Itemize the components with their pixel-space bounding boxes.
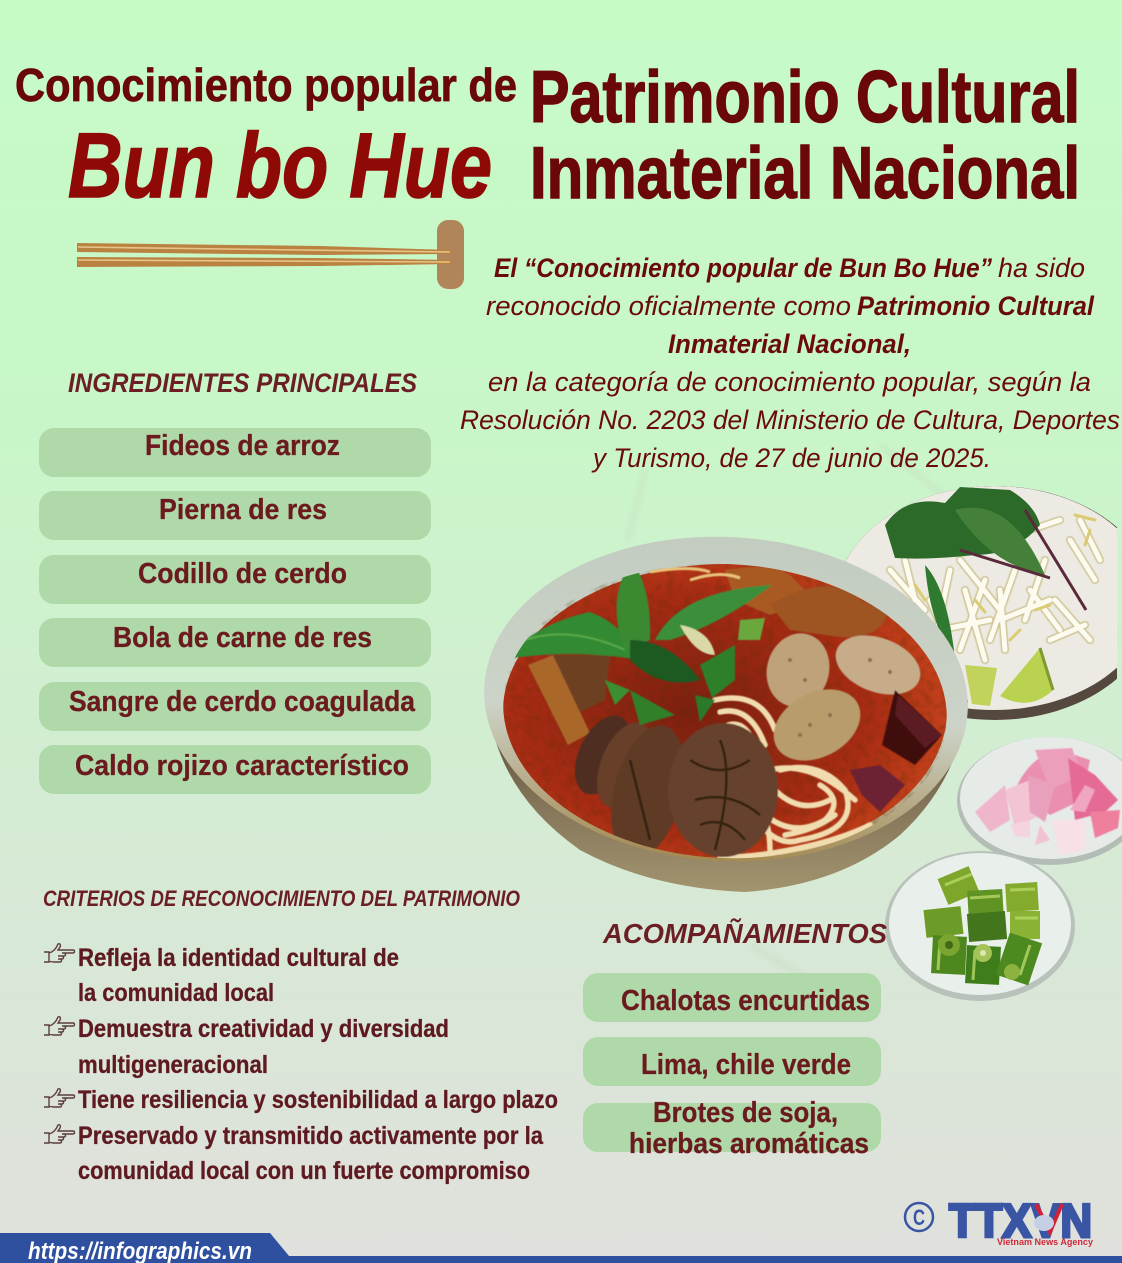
title: Conocimiento popular de Bun bo Hue: Conocimiento popular de bbox=[15, 59, 517, 111]
footer bar with URL bbox=[0, 1233, 1122, 1263]
item: chalotas encurtidas bbox=[583, 973, 881, 1022]
intro paragraph: Patrimonio Cultural bbox=[857, 291, 1094, 321]
item: chalotas encurtidas: Chalotas encurtidas bbox=[621, 985, 870, 1017]
heading: ingredientes principales: INGREDIENTES PRINCIPALES bbox=[68, 368, 417, 398]
ingredient: bola de carne de res bbox=[39, 618, 431, 667]
noodles bbox=[715, 698, 870, 858]
panel: criteria list bbox=[44, 944, 558, 1185]
logo: TTXVN: TTXVN bbox=[949, 1194, 1092, 1247]
ingredient: fideos de arroz: Fideos de arroz bbox=[145, 430, 340, 462]
icon: pointing hand bbox=[44, 944, 74, 962]
intro paragraph: reconocido oficialmente como bbox=[486, 291, 851, 321]
heading: criterios de reconocimiento: CRITERIOS DE RECONOCIMIENTO DEL PATRIMONIO bbox=[43, 886, 520, 911]
criterion 2: Demuestra creatividad y diversidad bbox=[78, 1015, 449, 1043]
intro paragraph: Inmaterial Nacional, bbox=[668, 329, 911, 359]
criterion 4 bbox=[78, 1122, 544, 1185]
intro paragraph bbox=[460, 253, 1120, 473]
heading: acompañamientos: ACOMPAÑAMIENTOS bbox=[602, 918, 887, 949]
intro paragraph: ha sido bbox=[998, 253, 1085, 283]
ingredient: pierna de res bbox=[39, 491, 431, 540]
intro paragraph: en la categoría de conocimiento popular, según la bbox=[488, 367, 1091, 397]
image: herb and bean sprout plate bbox=[846, 486, 1117, 720]
intro paragraph: Resolución No. 2203 del Ministerio de Cultura, Deportes bbox=[460, 405, 1120, 435]
icon: pointing hand bbox=[44, 1017, 74, 1035]
title: Conocimiento popular de Bun bo Hue bbox=[15, 59, 517, 217]
ingredient: codillo de cerdo: Codillo de cerdo bbox=[138, 558, 347, 590]
logo: TTXVN: Vietnam News Agency bbox=[997, 1237, 1093, 1247]
intro paragraph: El “Conocimiento popular de Bun Bo Hue” bbox=[494, 253, 992, 283]
top meat pieces bbox=[650, 567, 888, 637]
criterion 2 bbox=[78, 1015, 449, 1079]
ingredient: bola de carne de res: Bola de carne de res bbox=[113, 622, 372, 654]
criterion 1 bbox=[78, 944, 399, 1007]
panel: accompaniments list bbox=[583, 973, 881, 1160]
item: lima, chile verde: Lima, chile verde bbox=[641, 1049, 851, 1081]
image: pickled shallots bowl bbox=[957, 737, 1122, 865]
basil and herbs bbox=[514, 572, 772, 726]
ingredient: caldo rojizo bbox=[39, 745, 431, 794]
criterion 4: Preservado y transmitido activamente por la bbox=[78, 1122, 544, 1150]
title: Conocimiento popular de Bun bo Hue: Bun bo Hue bbox=[68, 115, 492, 217]
criterion 1: Refleja la identidad cultural de bbox=[78, 944, 399, 972]
ingredient: sangre de cerdo coagulada bbox=[39, 682, 431, 731]
logo: TTXVN: C bbox=[913, 1205, 925, 1230]
title: Patrimonio Cultural Inmaterial Nacional bbox=[530, 57, 1080, 214]
ingredient: sangre de cerdo coagulada: Sangre de cerdo coagulada bbox=[69, 686, 416, 718]
ingredient: caldo rojizo: Caldo rojizo característico bbox=[75, 750, 409, 782]
meatballs bbox=[766, 632, 921, 762]
item: brotes de soja, hierbas aromáticas bbox=[583, 1097, 881, 1160]
item: lima, chile verde bbox=[583, 1037, 881, 1086]
ingredient: pierna de res: Pierna de res bbox=[159, 494, 327, 526]
ingredient: fideos de arroz bbox=[39, 428, 431, 477]
item: brotes de soja, hierbas aromáticas: hierbas aromáticas bbox=[629, 1128, 869, 1160]
image: bowl of bun bo hue bbox=[476, 525, 976, 892]
criterion 2: multigeneracional bbox=[78, 1051, 268, 1079]
panel: ingredients list bbox=[39, 428, 431, 794]
sliced beef bbox=[574, 715, 778, 858]
icon: pointing hand bbox=[44, 1089, 74, 1107]
criterion 3: Tiene resiliencia y sostenibilidad a largo plazo bbox=[78, 1086, 558, 1114]
intro paragraph: y Turismo, de 27 de junio de 2025. bbox=[591, 443, 991, 473]
blood cubes bbox=[850, 690, 942, 812]
item: brotes de soja, hierbas aromáticas: Brotes de soja, bbox=[653, 1097, 838, 1129]
left tendon and beef bbox=[528, 655, 610, 745]
icon: chopsticks and rest bbox=[77, 220, 464, 289]
icon: pointing hand bbox=[44, 1125, 74, 1143]
image: green chilli bowl bbox=[885, 851, 1075, 1001]
ingredient: codillo de cerdo bbox=[39, 555, 431, 604]
criterion 4: comunidad local con un fuerte compromiso bbox=[78, 1157, 530, 1185]
criterion 1: la comunidad local bbox=[78, 979, 274, 1007]
